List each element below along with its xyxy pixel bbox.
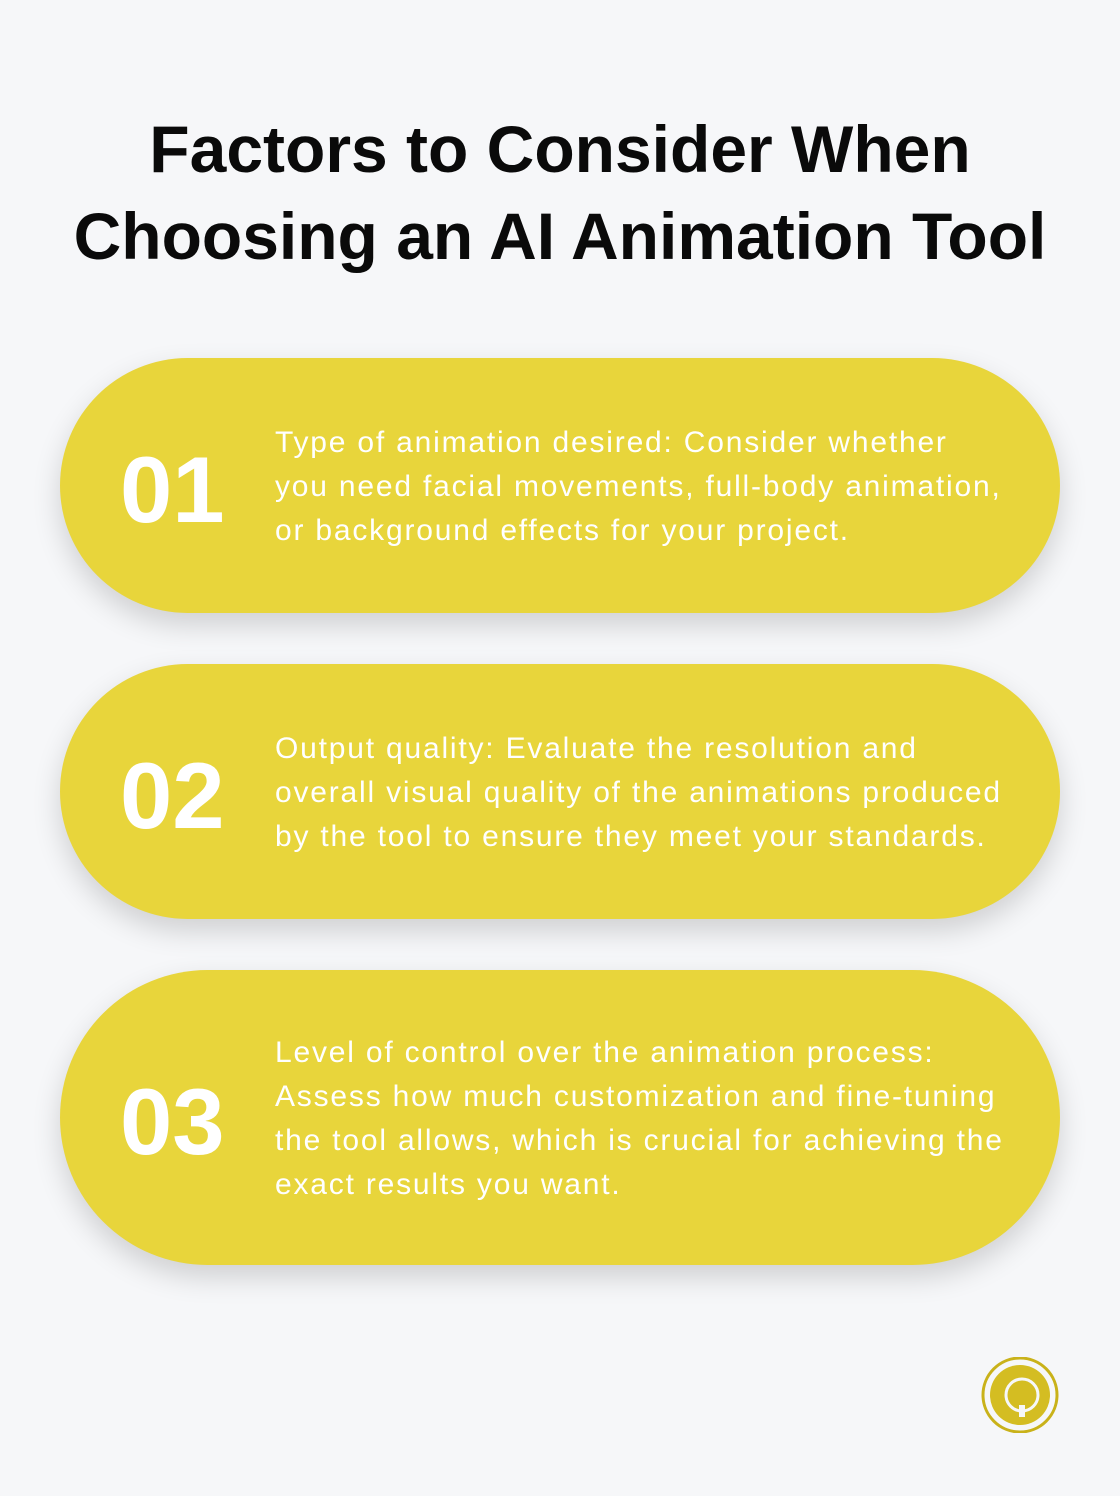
number 01: 01 [120, 437, 225, 542]
text 01: Type of animation desired: Consider whether [275, 426, 948, 459]
number 02: 02 [120, 743, 225, 848]
title: Factors to Consider When [149, 112, 971, 186]
text 03: the tool allows, which is crucial for achieving the [275, 1124, 1004, 1157]
text 02: by the tool to ensure they meet your standards. [275, 820, 987, 853]
text 01: or background effects for your project. [275, 514, 850, 547]
text 02: overall visual quality of the animations produced [275, 776, 1002, 809]
card 02 [60, 664, 1060, 919]
title: Choosing an AI Animation Tool [74, 199, 1046, 273]
text 02 [275, 732, 1002, 853]
text 01 [275, 426, 1002, 547]
logo [982, 1357, 1058, 1433]
text 03: exact results you want. [275, 1168, 622, 1201]
number 03: 03 [120, 1069, 225, 1174]
text 02: Output quality: Evaluate the resolution and [275, 732, 918, 765]
card 01 [60, 358, 1060, 613]
text 03 [275, 1036, 1004, 1201]
text 01: you need facial movements, full-body animation, [275, 470, 1002, 503]
text 03: Assess how much customization and fine-tuning [275, 1080, 996, 1113]
text 03: Level of control over the animation process: [275, 1036, 935, 1069]
title [74, 112, 1046, 273]
card 03 [60, 970, 1060, 1265]
